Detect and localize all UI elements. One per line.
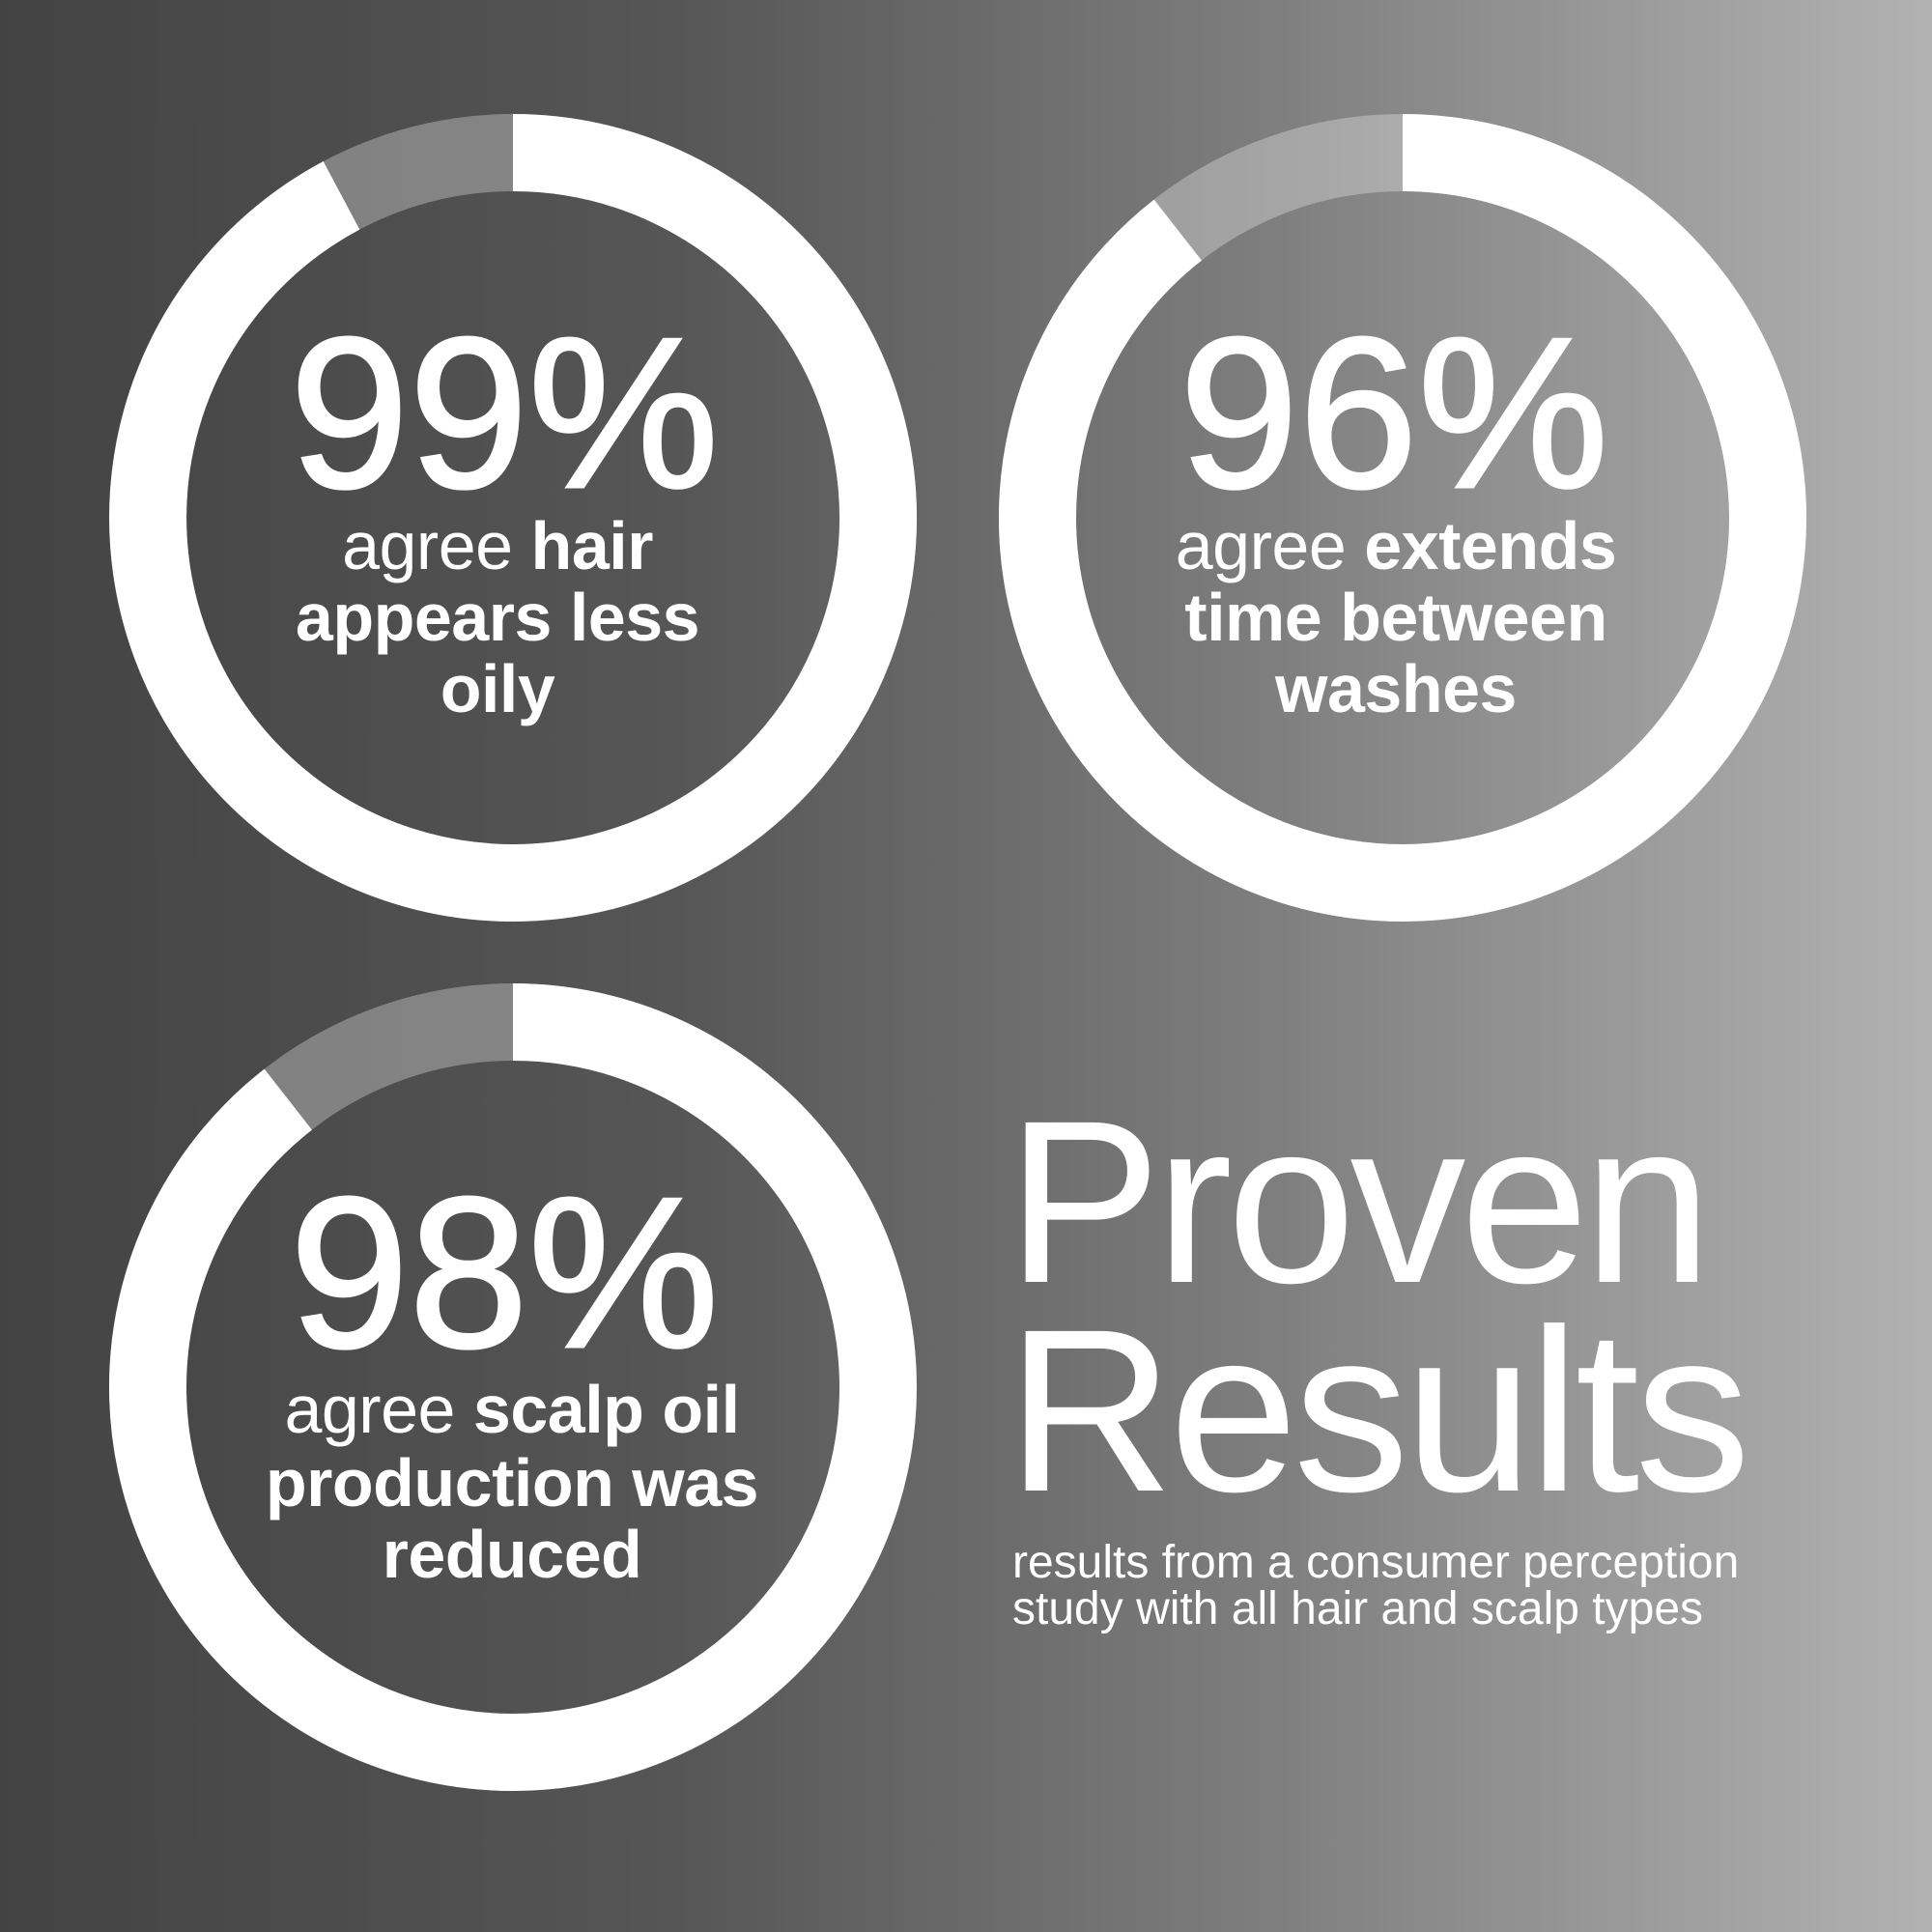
text: label 3: production was <box>266 1445 758 1520</box>
title: Proven Results: Proven <box>1007 1072 1706 1331</box>
text: subtitle: study with all hair and scalp types <box>1012 1583 1703 1634</box>
text: label 1: appears less <box>296 580 699 655</box>
text: subtitle: results from a consumer perception <box>1012 1537 1739 1588</box>
stat: 99%: 99% <box>290 294 719 533</box>
text: label 1: oily <box>440 651 555 726</box>
panel: ring 96% <box>1037 153 1768 883</box>
text: label 3: reduced <box>383 1517 641 1592</box>
title: Proven Results <box>1007 1072 1746 1540</box>
title: Proven Results: Results <box>1007 1281 1746 1540</box>
panel: ring 99% <box>148 153 878 883</box>
text: label 2: agree extends <box>1176 508 1616 583</box>
text: label 3: agree scalp oil <box>284 1372 740 1447</box>
text: label 1: agree hair <box>342 508 653 583</box>
text: label 2: washes <box>1274 651 1517 726</box>
stat: 96%: 96% <box>1179 294 1608 533</box>
text: label 2: time between <box>1184 580 1607 655</box>
stat: 98%: 98% <box>290 1153 719 1393</box>
panel: ring 98% <box>148 1022 878 1752</box>
